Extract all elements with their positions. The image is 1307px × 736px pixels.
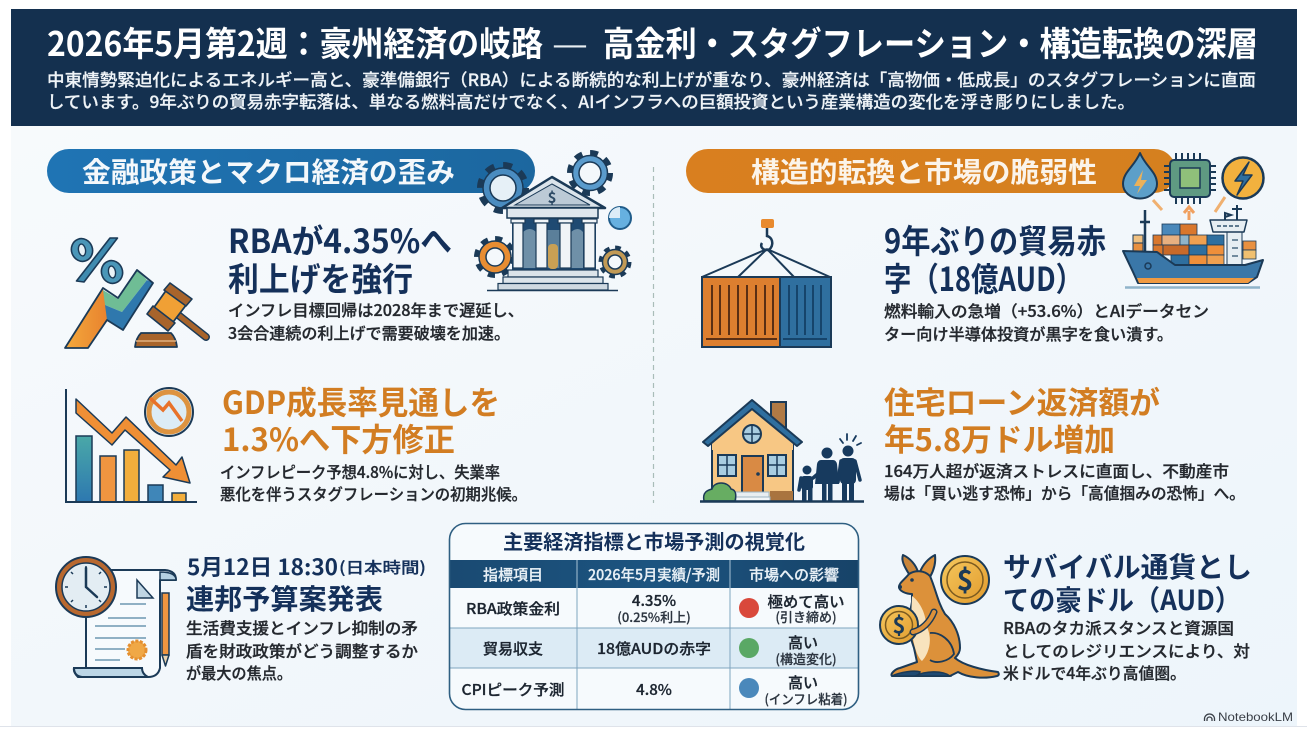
icon: clock and budget document: [56, 557, 176, 677]
icon: house and family: [700, 400, 864, 502]
body text: trade deficit: 燃料輸入の急増（+53.6%）とAIデータセン: [884, 298, 1209, 322]
body text: RBA rate hike: インフレ目標回帰は2028年まで遅延し、: [228, 297, 524, 321]
icon: percent, rising chart and gavel: [65, 236, 206, 348]
heading: GDP forecast: GDP成長率見通しを: [222, 378, 500, 424]
header band: [11, 9, 1297, 126]
panel: RBA rate hike: [65, 215, 524, 348]
heading: mortgage repayments: 年5.8万ドル増加: [884, 415, 1115, 460]
body text: GDP forecast: [220, 459, 527, 505]
title: [47, 17, 1258, 66]
table row: trade balance: 貿易収支: [483, 638, 543, 659]
section heading: structural change: [686, 149, 1176, 193]
body text: federal budget: 生活費支援とインフレ抑制の矛: [186, 615, 418, 639]
table row: trade balance: (構造変化): [775, 649, 837, 668]
heading: GDP forecast: [222, 378, 500, 461]
table: key economic indicators: [449, 524, 859, 710]
header summary text: 中東情勢緊迫化によるエネルギー高と、豪準備銀行（RBA）による断続的な利上げが重なり、豪州経済は「高物価・低成長」のスタグフレーションに直面: [47, 66, 1256, 91]
table row: trade balance: 18億AUDの赤字: [597, 638, 711, 659]
heading: budget date: 連邦予算案発表: [186, 578, 383, 618]
table header row: 2026年5月実績/予測: [588, 564, 720, 585]
table row: trade balance: 高い: [788, 632, 818, 653]
table row: RBA policy rate: RBA政策金利: [466, 598, 560, 619]
body text: GDP forecast: 悪化を伴うスタグフレーションの初期兆候。: [220, 481, 527, 505]
heading: Australian dollar: ての豪ドル（AUD）: [1003, 579, 1241, 619]
icon: kangaroo with coins: [880, 555, 999, 678]
section heading: monetary policy: 金融政策とマクロ経済の歪み: [82, 151, 455, 191]
watermark: NotebookLM: NotebookLM: [1218, 710, 1293, 724]
title: 2026年5月第2週：豪州経済の岐路: [47, 17, 543, 66]
title: 高金利・スタグフレーション・構造転換の深層: [603, 17, 1258, 66]
table row: RBA policy rate: [466, 590, 844, 626]
table row: CPI peak forecast: CPIピーク予測: [462, 679, 564, 700]
status dot: red: [739, 598, 759, 618]
icon: central bank with gears: $: [548, 187, 556, 208]
header summary text: [47, 66, 1256, 113]
body text: RBA rate hike: 3会合連続の利上げで需要破壊を加速。: [228, 320, 510, 344]
heading: GDP forecast: 1.3%へ下方修正: [222, 415, 455, 461]
table header row: [483, 564, 839, 585]
heading: Australian dollar: サバイバル通貨とし: [1003, 546, 1252, 586]
heading: budget date: (日本時間): [339, 556, 426, 578]
heading: trade deficit: [884, 215, 1106, 301]
icon: kangaroo with coins: $: [893, 608, 905, 640]
panel: Australian dollar: [880, 546, 1252, 684]
body text: federal budget: [186, 615, 418, 684]
body text: GDP forecast: インフレピーク予想4.8%に対し、失業率: [220, 459, 500, 483]
table row: RBA policy rate: 4.35%: [632, 590, 676, 611]
table header row: 市場への影響: [749, 564, 839, 585]
table row: CPI peak forecast: 4.8%: [636, 679, 672, 700]
table row: CPI peak forecast: [462, 672, 848, 708]
section heading: monetary policy: [47, 149, 535, 193]
status dot: blue: [739, 678, 759, 698]
icon: central bank with gears: [477, 153, 631, 290]
body text: federal budget: が最大の焦点。: [186, 660, 292, 684]
body text: Australian dollar: 米ドルで4年ぶり高値圏。: [1003, 660, 1186, 684]
icon: falling bar chart: [66, 388, 197, 502]
body text: RBA rate hike: [228, 297, 524, 344]
panel: GDP forecast: [66, 378, 527, 505]
heading: RBA rate hike: 利上げを強行: [228, 253, 413, 301]
table row: trade balance: [483, 632, 837, 668]
panel: mortgage repayments: [700, 378, 1245, 504]
body text: Australian dollar: [1003, 615, 1250, 684]
heading: trade deficit: 9年ぶりの貿易赤: [884, 215, 1106, 263]
heading: mortgage repayments: 住宅ローン返済額が: [884, 378, 1160, 423]
heading: mortgage repayments: [884, 378, 1160, 460]
panel: federal budget: [56, 550, 426, 684]
dashed column divider: [652, 167, 654, 503]
table row: RBA policy rate: (引き締め): [775, 607, 837, 626]
body text: Australian dollar: RBAのタカ派スタンスと資源国: [1003, 615, 1234, 639]
body text: Australian dollar: としてのレジリエンスにより、対: [1003, 638, 1250, 662]
heading: trade deficit: 字（18億AUD）: [884, 253, 1083, 301]
title: —: [552, 17, 588, 66]
table row: CPI peak forecast: (インフレ粘着): [764, 689, 848, 708]
body text: federal budget: 盾を財政政策がどう調整するか: [186, 638, 418, 662]
status dot: green: [739, 638, 759, 658]
heading: RBA rate hike: [228, 215, 452, 301]
heading: budget date: [186, 550, 426, 618]
heading: Australian dollar: [1003, 546, 1252, 619]
body text: mortgage repayments: [884, 458, 1245, 504]
table header row: 指標項目: [483, 564, 543, 585]
body text: mortgage repayments: 164万人超が返済ストレスに直面し、不動産市: [884, 458, 1229, 482]
table title: 主要経済指標と市場予測の視覚化: [503, 526, 805, 555]
icon: ship with water, chip and energy: [1123, 153, 1264, 288]
header summary text: しています。9年ぶりの貿易赤字転落は、単なる燃料高だけでなく、AIインフラへの巨額投資という産業構造の変化を浮き彫りにしました。: [47, 88, 1135, 113]
panel: trade deficit: [702, 215, 1209, 347]
icon: hoisted shipping container: [702, 219, 831, 347]
table row: CPI peak forecast: 高い: [788, 672, 818, 693]
section heading: structural change: 構造的転換と市場の脆弱性: [751, 151, 1097, 191]
heading: budget date: 5月12日 18:30: [187, 550, 338, 582]
icon: kangaroo with coins: $: [957, 559, 973, 599]
body text: trade deficit: [884, 298, 1209, 345]
body text: trade deficit: ター向け半導体投資が黒字を食い潰す。: [884, 321, 1173, 345]
table row: RBA policy rate: (0.25%利上): [617, 607, 691, 626]
body text: mortgage repayments: 場は「買い逃す恐怖」から「高値掴みの恐怖」へ。: [884, 480, 1245, 504]
table row: RBA policy rate: 極めて高い: [768, 591, 844, 612]
heading: RBA rate hike: RBAが4.35%へ: [228, 215, 452, 263]
